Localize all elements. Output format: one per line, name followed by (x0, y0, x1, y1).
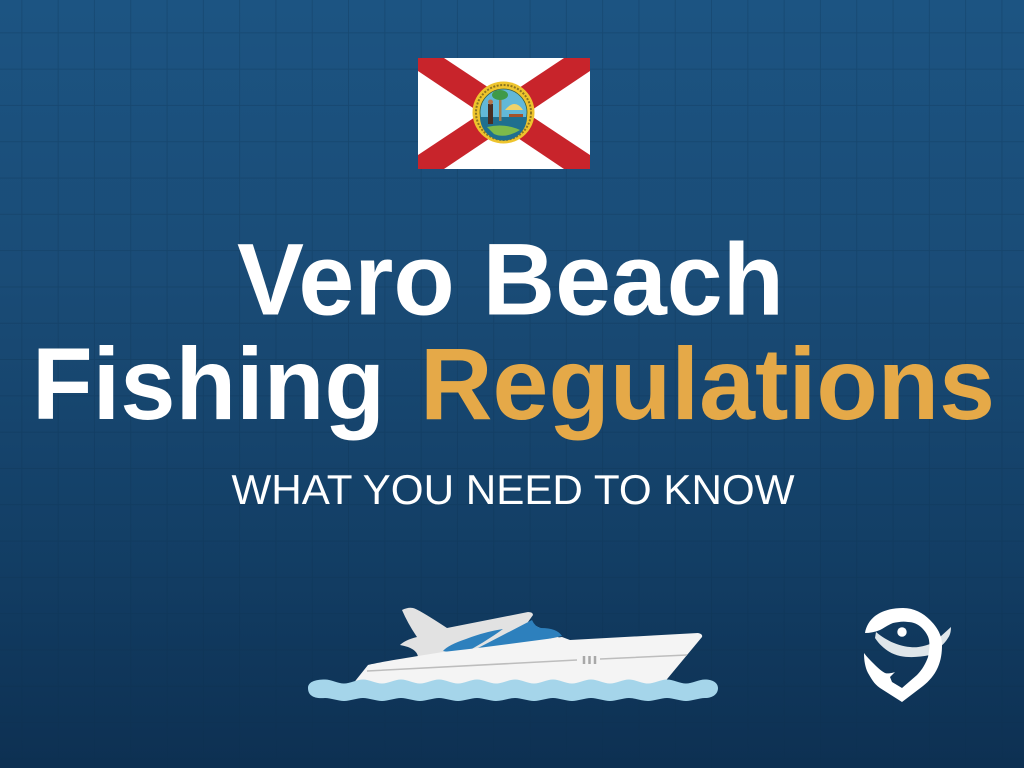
tail (940, 627, 951, 647)
boat fin and cabin (400, 608, 568, 657)
hull stripe (367, 655, 687, 671)
fish eye (897, 627, 907, 637)
title: Vero Beach: Vero Beach (237, 222, 784, 336)
hull vents (584, 656, 595, 664)
title: Fishing: Fishing (32, 327, 385, 441)
icon: Florida flag (418, 58, 590, 169)
boat windows (443, 620, 562, 652)
icon: boat on water (308, 608, 718, 701)
subtitle: WHAT YOU NEED TO KNOW (232, 466, 795, 513)
logo outline (864, 608, 942, 702)
boat hull (348, 633, 702, 690)
icon: fish logo (864, 608, 951, 702)
water (308, 680, 718, 701)
fish band (875, 632, 930, 657)
title: Regulations: Regulations (420, 327, 995, 441)
